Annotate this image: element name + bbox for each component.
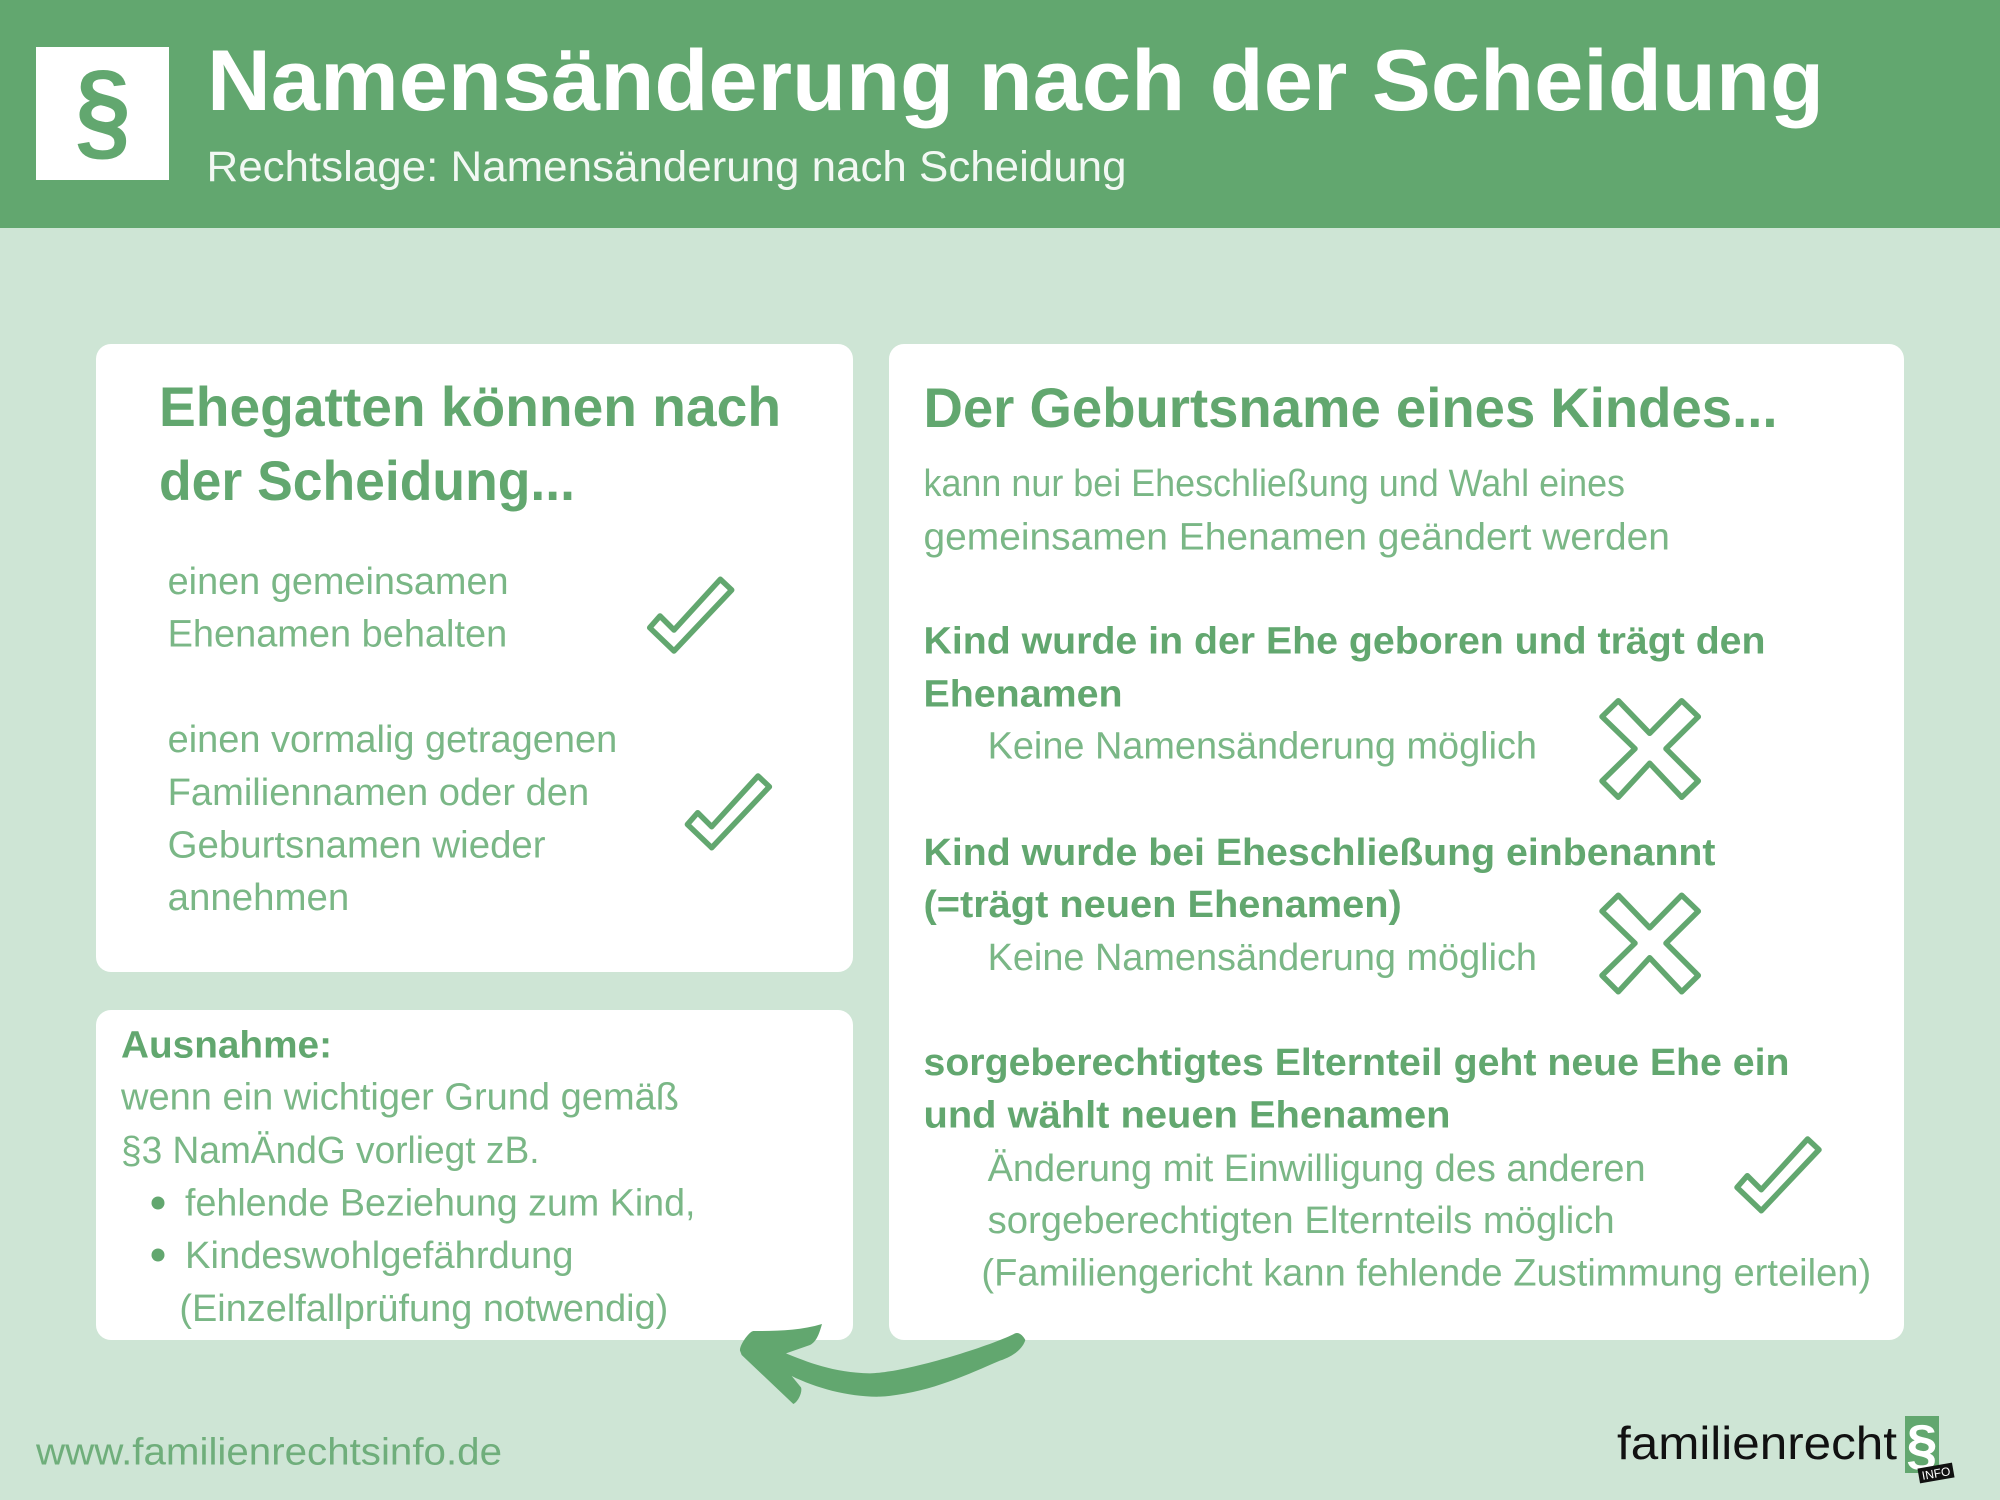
case three heading: und wählt neuen Ehenamen: [924, 1094, 1450, 1136]
case one result: Keine Namensänderung möglich: [988, 726, 1537, 768]
header band: [0, 0, 2000, 228]
case three result: Änderung mit Einwilligung des anderen: [988, 1148, 1646, 1190]
text: resume former name: Geburtsnamen wieder: [168, 824, 546, 866]
title: Namensänderung nach der Scheidung: [207, 33, 1824, 129]
heading: spouses: der Scheidung...: [159, 449, 575, 512]
panel: birth name of a child: [889, 344, 1904, 1340]
bullet list: (Einzelfallprüfung notwendig): [179, 1288, 668, 1330]
bullet list: [152, 1183, 696, 1330]
icon: check mark three: [1737, 1139, 1819, 1211]
panel: exception: [96, 1010, 853, 1340]
case two heading: Kind wurde bei Eheschließung einbenannt: [924, 832, 1716, 874]
text: keep common married name: einen gemeinsamen: [168, 561, 509, 603]
icon: cross two: [1602, 895, 1698, 992]
logo: familienrecht info: §: [1906, 1413, 1938, 1476]
text: keep common married name: Ehenamen behalten: [168, 614, 507, 656]
arrow: from birth name panel to exception panel: [740, 1324, 1025, 1404]
case three heading: sorgeberechtigtes Elternteil geht neue Ehe ein: [924, 1042, 1790, 1084]
logo: familienrecht info: [1617, 1413, 1955, 1483]
case three result: (Familiengericht kann fehlende Zustimmung erteilen): [981, 1253, 1871, 1295]
icon: paragraph sign box: [36, 47, 169, 180]
subtitle: Rechtslage: Namensänderung nach Scheidung: [206, 143, 1126, 191]
case two result: Keine Namensänderung möglich: [988, 937, 1537, 979]
logo: familienrecht info: familienrecht: [1617, 1417, 1897, 1469]
exception text: wenn ein wichtiger Grund gemäß: [120, 1077, 679, 1119]
case one heading: Ehenamen: [924, 674, 1122, 716]
case one heading: Kind wurde in der Ehe geboren und trägt den: [924, 621, 1766, 663]
bullet list: fehlende Beziehung zum Kind,: [185, 1183, 696, 1225]
case three result: sorgeberechtigten Elternteils möglich: [988, 1200, 1615, 1242]
exception text: §3 NamÄndG vorliegt zB.: [121, 1130, 540, 1172]
bullet list: Kindeswohlgefährdung: [185, 1235, 574, 1277]
icon: cross one: [1602, 701, 1698, 797]
intro text: kann nur bei Eheschließung und Wahl eines: [924, 463, 1625, 505]
icon: check mark two: [687, 776, 769, 848]
heading: spouses: Ehegatten können nach: [159, 375, 781, 438]
intro text: gemeinsamen Ehenamen geändert werden: [924, 516, 1670, 558]
website url: www.familienrechtsinfo.de: [35, 1431, 502, 1473]
text: resume former name: einen vormalig getragenen: [168, 719, 617, 761]
logo: familienrecht info: INFO: [1921, 1464, 1951, 1483]
icon: paragraph sign box: §: [75, 48, 131, 171]
text: resume former name: Familiennamen oder den: [168, 772, 589, 814]
heading: birth name: Der Geburtsname eines Kindes...: [924, 376, 1778, 439]
panel: spouses after divorce: [96, 344, 853, 972]
text: resume former name: annehmen: [168, 877, 349, 919]
case two heading: (=trägt neuen Ehenamen): [924, 884, 1402, 926]
icon: check mark one: [650, 579, 732, 651]
exception heading: Ausnahme:: [121, 1024, 332, 1066]
